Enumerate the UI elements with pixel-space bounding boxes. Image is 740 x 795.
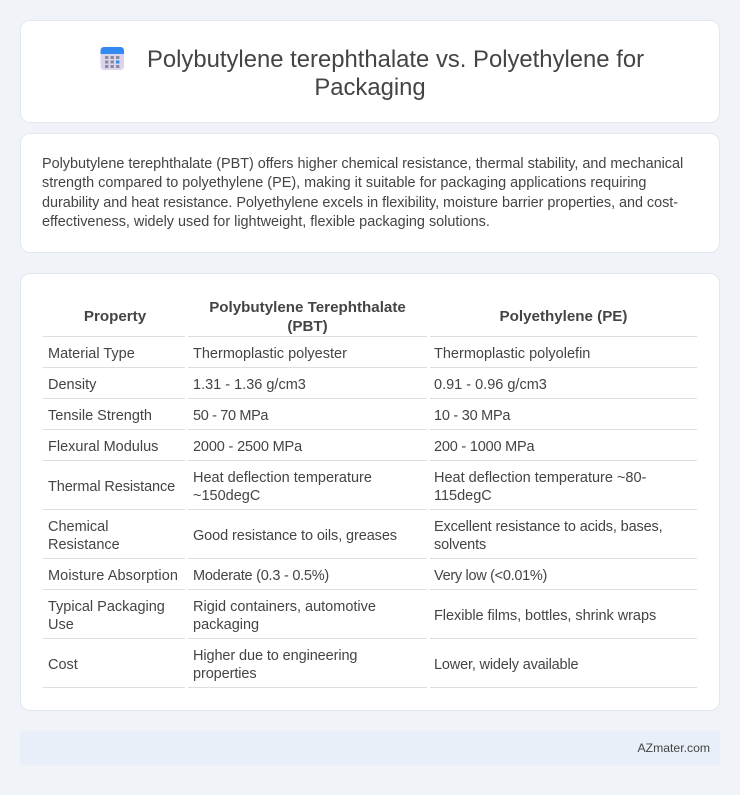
icon: calendar <box>100 47 124 70</box>
row: Material Type: Thermoplastic polyolefin <box>434 346 590 362</box>
row: Thermal Resistance <box>48 470 646 504</box>
summary text: effectiveness, widely used for lightweight, flexible packaging solutions. <box>42 214 490 230</box>
row: Thermal Resistance: Heat deflection temperature <box>193 470 372 486</box>
footer bar <box>20 731 720 765</box>
row: Moisture Absorption: Moisture Absorption <box>48 568 178 584</box>
row: Flexural Modulus: Flexural Modulus <box>48 439 158 455</box>
footer credit: AZmater.com <box>638 741 710 755</box>
row: Tensile Strength <box>48 408 510 424</box>
row: Flexural Modulus <box>48 439 535 455</box>
table header: (PBT) <box>287 318 328 335</box>
row: Typical Packaging Use: Flexible films, bottles, shrink wraps <box>434 608 656 624</box>
row: Tensile Strength: 10 - 30 MPa <box>434 408 510 424</box>
table header: Polybutylene Terephthalate <box>209 299 406 316</box>
row: Chemical Resistance: solvents <box>434 537 486 553</box>
row: Chemical Resistance: Good resistance to oils, greases <box>193 528 397 544</box>
row: Moisture Absorption: Very low (<0.01%) <box>434 568 547 584</box>
table header <box>84 299 627 335</box>
table header: Polyethylene (PE) <box>500 308 627 325</box>
row: Density: 0.91 - 0.96 g/cm3 <box>434 377 547 393</box>
row: Thermal Resistance: 115degC <box>434 488 492 504</box>
row: Material Type: Material Type <box>48 346 135 362</box>
row: Cost: Higher due to engineering <box>193 648 357 664</box>
row: Thermal Resistance: Heat deflection temperature ~80- <box>434 470 646 486</box>
title: Polybutylene terephthalate vs. Polyethylene for <box>147 46 644 73</box>
row: Typical Packaging Use: Rigid containers, automotive <box>193 599 376 615</box>
row: Density <box>48 377 547 393</box>
row: Thermal Resistance: Thermal Resistance <box>48 479 175 495</box>
title: Packaging <box>314 74 426 101</box>
row: Cost: Lower, widely available <box>434 657 578 673</box>
panel: title card <box>20 20 720 123</box>
row: Chemical Resistance: Resistance <box>48 537 120 553</box>
row: Tensile Strength: Tensile Strength <box>48 408 152 424</box>
row: Material Type <box>48 346 590 362</box>
row: Tensile Strength: 50 - 70 MPa <box>193 408 268 424</box>
row: Chemical Resistance: Chemical <box>48 519 108 535</box>
row: Cost <box>48 648 578 682</box>
row: Moisture Absorption <box>48 568 547 584</box>
panel: summary <box>20 133 720 253</box>
row: Typical Packaging Use: packaging <box>193 617 259 633</box>
summary text: Polybutylene terephthalate (PBT) offers higher chemical resistance, thermal stability, and mechanical <box>42 156 683 172</box>
summary text <box>42 156 683 230</box>
row: Material Type: Thermoplastic polyester <box>193 346 347 362</box>
row: Chemical Resistance <box>48 519 663 553</box>
row: Flexural Modulus: 200 - 1000 MPa <box>434 439 534 455</box>
row: Moisture Absorption: Moderate (0.3 - 0.5%) <box>193 568 329 584</box>
comparison table <box>43 299 697 688</box>
panel: comparison table <box>20 273 720 711</box>
table header: Property <box>84 308 146 325</box>
row: Typical Packaging Use: Use <box>48 617 74 633</box>
row: Chemical Resistance: Excellent resistance to acids, bases, <box>434 519 663 535</box>
row: Density: Density <box>48 377 96 393</box>
summary text: durability and heat resistance. Polyethylene excels in flexibility, moisture barrier properties, and cost- <box>42 195 678 211</box>
row: Typical Packaging Use <box>48 599 656 633</box>
row: Density: 1.31 - 1.36 g/cm3 <box>193 377 306 393</box>
summary text: strength compared to polyethylene (PE), making it suitable for packaging applications requiring <box>42 175 646 191</box>
row: Typical Packaging Use: Typical Packaging <box>48 599 165 615</box>
row: Thermal Resistance: ~150degC <box>193 488 260 504</box>
row: Flexural Modulus: 2000 - 2500 MPa <box>193 439 302 455</box>
row: Cost: Cost <box>48 657 78 673</box>
title <box>147 46 644 101</box>
row: Cost: properties <box>193 666 256 682</box>
